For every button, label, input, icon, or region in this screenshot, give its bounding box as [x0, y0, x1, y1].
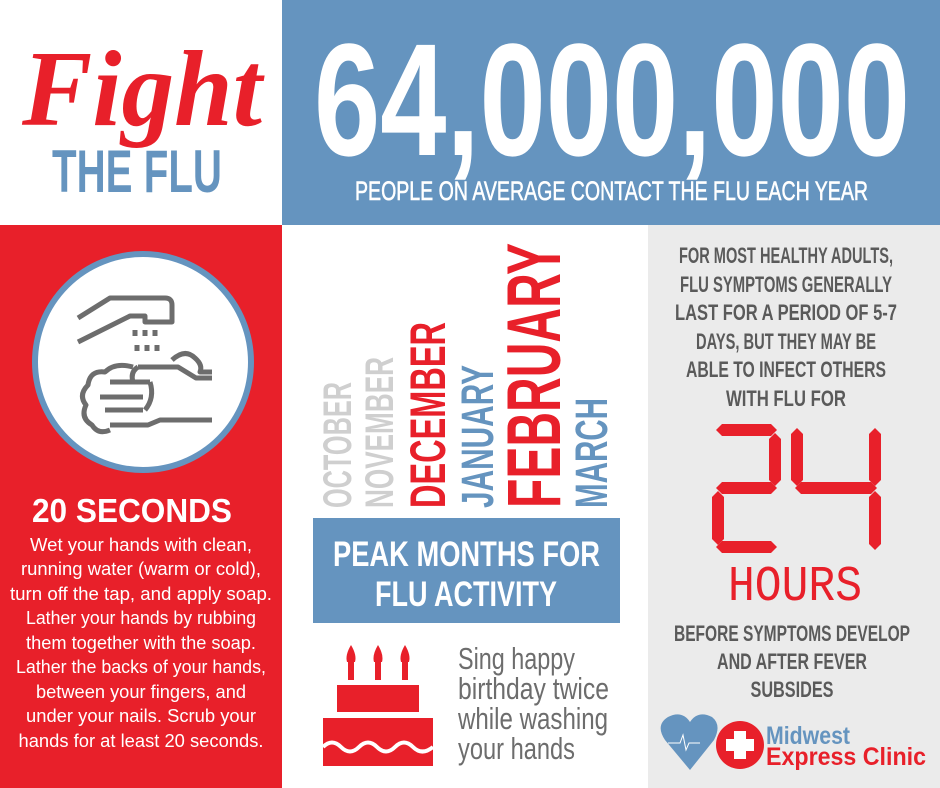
panel: hand washing — [0, 225, 282, 788]
heading: Fight: Fight — [21, 30, 265, 149]
text block: sing happy birthday: birthday twice — [458, 671, 609, 706]
heading: THE FLU: THE FLU — [52, 138, 222, 205]
text block: instructions: Lather your hands by rubbing — [26, 608, 256, 628]
text block: instructions: hands for at least 20 seconds. — [18, 731, 264, 751]
chart: months: MARCH — [566, 398, 617, 508]
text block: symptoms — [675, 243, 897, 411]
logo: Midwest Express Clinic: Midwest — [766, 722, 851, 750]
text block: instructions: Lather the backs of your hands, — [16, 657, 266, 677]
icon: birthday cake — [323, 645, 433, 766]
panel: contagious period — [648, 225, 940, 788]
text block: before symptoms: SUBSIDES — [750, 677, 834, 702]
chart: months: NOVEMBER — [358, 357, 402, 508]
big number: 24 seven-segment — [712, 424, 881, 553]
text block: instructions: between your fingers, and — [36, 682, 246, 702]
heading: HOURS: HOURS — [728, 559, 862, 616]
text block: before symptoms: AND AFTER FEVER — [717, 649, 867, 674]
callout: peak months label: PEAK MONTHS FOR — [333, 535, 600, 574]
logo: Midwest Express Clinic: Express Clinic — [766, 743, 926, 771]
panel: peak months — [282, 225, 648, 788]
text block: instructions: Wet your hands with clean, — [30, 535, 252, 555]
text block: instructions: them together with the soap. — [26, 633, 256, 653]
text block: symptoms: WITH FLU FOR — [726, 386, 846, 411]
text block: instructions — [10, 535, 272, 751]
heading: 20 SECONDS: 20 SECONDS — [32, 492, 232, 529]
callout: peak months label: FLU ACTIVITY — [375, 575, 557, 614]
chart: months — [316, 243, 617, 508]
chart: months: JANUARY — [452, 365, 503, 508]
chart: months: FEBRUARY — [492, 243, 577, 508]
chart: months: DECEMBER — [400, 322, 456, 508]
callout: peak months label — [313, 518, 620, 623]
chart: months: OCTOBER — [316, 382, 360, 508]
text block: sing happy birthday — [457, 641, 609, 766]
text block: sing happy birthday: Sing happy — [458, 641, 575, 676]
text block: before symptoms — [674, 621, 910, 702]
logo: Midwest Express Clinic — [661, 714, 926, 771]
icon: hand washing — [35, 254, 251, 470]
text block: instructions: turn off the tap, and apply soap. — [10, 584, 272, 604]
text block: sing happy birthday: your hands — [458, 731, 575, 766]
text block: sing happy birthday: while washing — [457, 701, 608, 736]
text block: instructions: under your nails. Scrub your — [26, 706, 256, 726]
text block: instructions: running water (warm or cold), — [21, 559, 261, 579]
panel: title — [0, 0, 282, 225]
panel: statistic — [282, 0, 940, 225]
